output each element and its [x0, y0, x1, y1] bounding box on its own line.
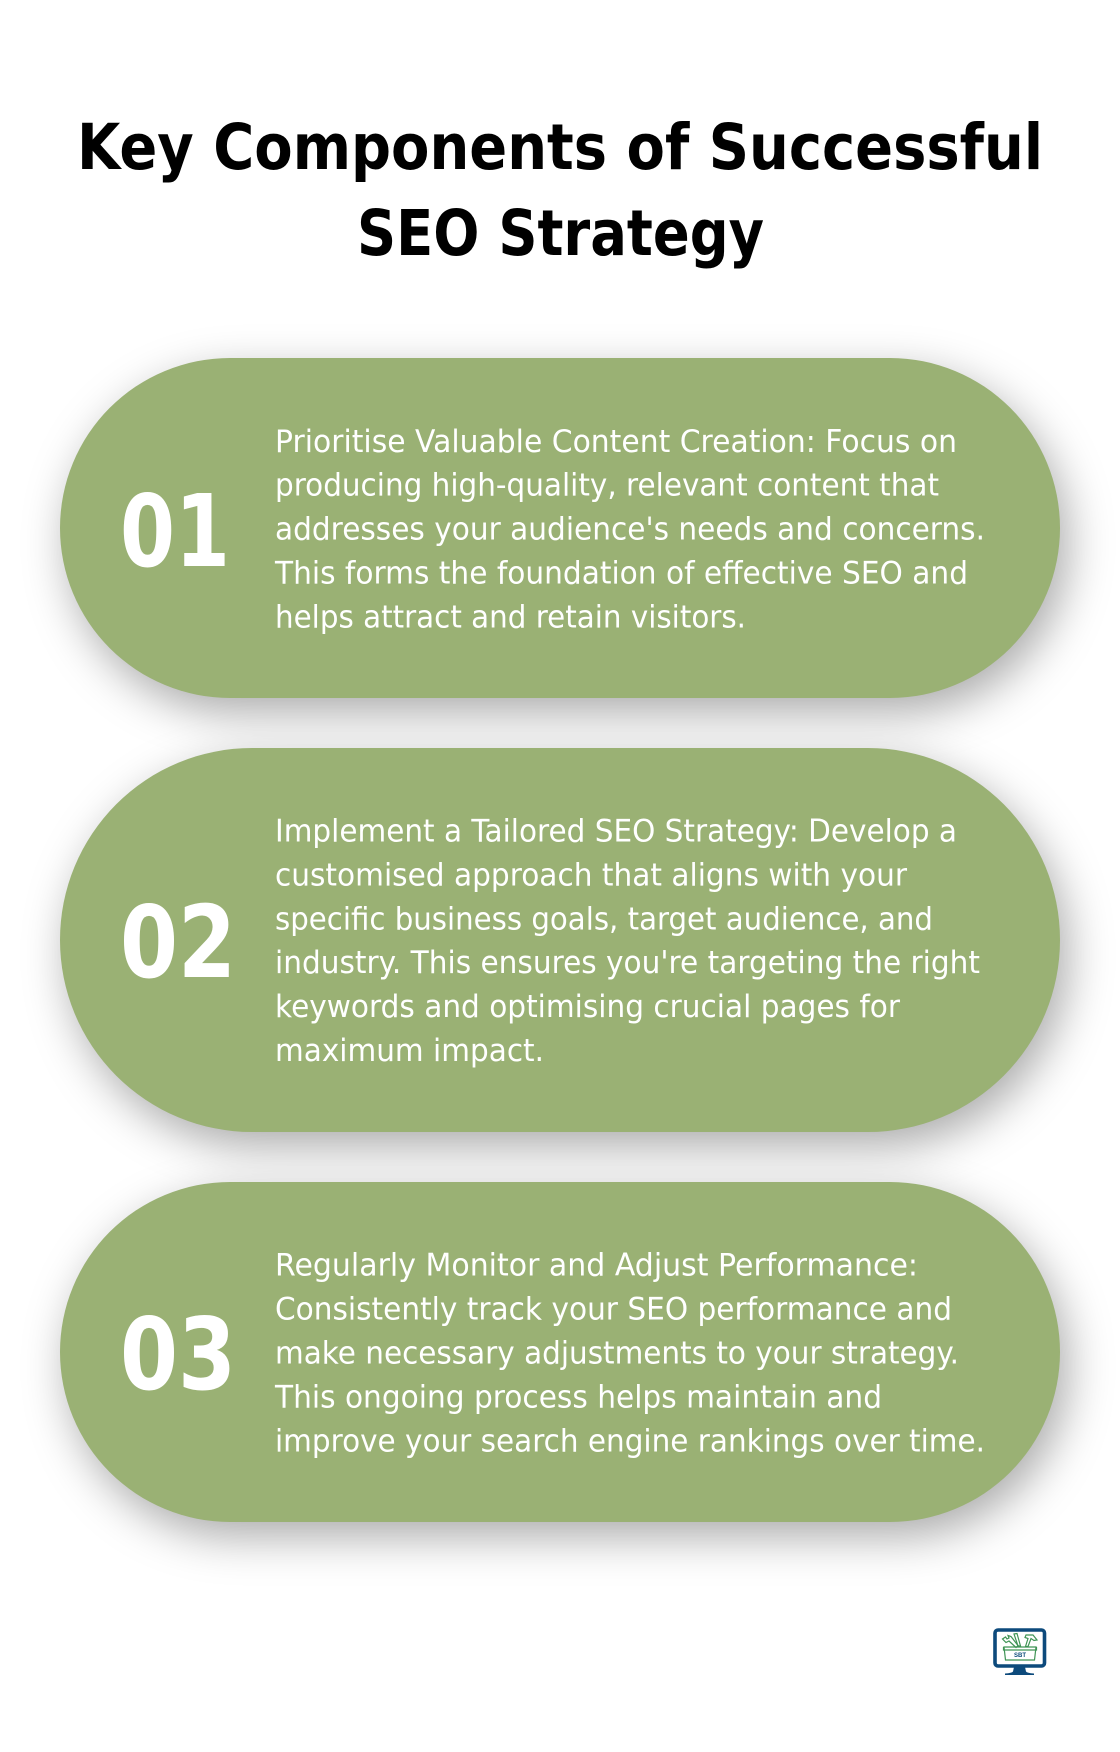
text block: step 02: [275, 814, 980, 1069]
text block: step 03: make necessary adjustments to your strategy.: [275, 1336, 959, 1372]
text block: step 02: customised approach that aligns with your: [275, 858, 907, 894]
text block: step 02: Implement a Tailored SEO Strategy: Develop a: [275, 814, 957, 850]
text block: step 03: Regularly Monitor and Adjust Performance:: [275, 1248, 918, 1284]
text block: step 02: keywords and optimising crucial pages for: [275, 989, 900, 1025]
text block: step 03: Consistently track your SEO performance and: [275, 1292, 952, 1328]
icon: monitor with toolbox logo: [995, 1630, 1044, 1675]
text block: step 03: [274, 1248, 985, 1460]
text block: step 01: This forms the foundation of effective SEO and: [274, 556, 968, 592]
text block: step 03: This ongoing process helps maintain and: [274, 1380, 882, 1416]
text block: step 01: [274, 424, 985, 636]
title: [77, 111, 1043, 270]
panel: step 03: [60, 1182, 1060, 1522]
panel: step 01: [60, 358, 1060, 698]
text block: step 02: maximum impact.: [275, 1033, 544, 1069]
number 03: 03: [120, 1296, 236, 1413]
text block: step 02: industry. This ensures you're targeting the right: [275, 945, 980, 981]
number 02: 02: [120, 884, 236, 1001]
text block: step 01: helps attract and retain visitors.: [275, 600, 746, 636]
text block: step 01: Prioritise Valuable Content Creation: Focus on: [275, 424, 957, 460]
text block: step 01: addresses your audience's needs and concerns.: [275, 512, 985, 548]
text block: step 01: producing high-quality, relevant content that: [275, 468, 939, 504]
panel: step 02: [60, 748, 1060, 1132]
title: SEO Strategy: [357, 197, 764, 270]
text block: step 02: specific business goals, target audience, and: [275, 902, 933, 938]
number 01: 01: [120, 473, 230, 590]
icon: monitor with toolbox logo: SBT: [1014, 1653, 1026, 1659]
text block: step 03: improve your search engine rankings over time.: [275, 1424, 985, 1460]
